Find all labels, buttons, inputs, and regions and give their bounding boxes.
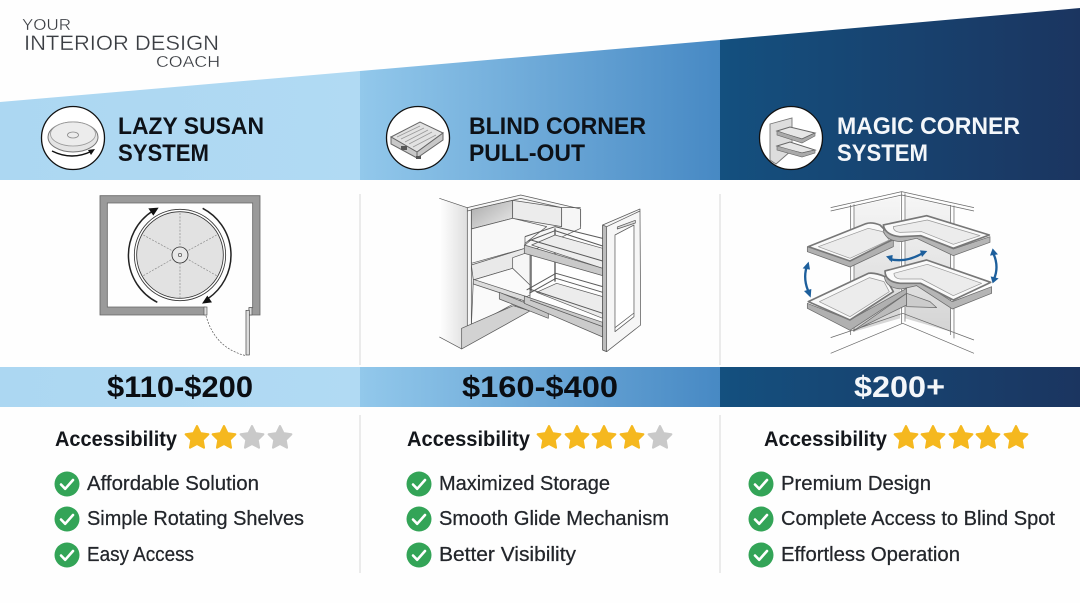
rating: blind corner: Accessibility <box>407 428 530 451</box>
price band: magic corner <box>720 367 1080 407</box>
logo: INTERIOR DESIGN <box>24 32 219 55</box>
feature list: lazy susan: Affordable Solution <box>87 473 259 495</box>
logo: YOUR <box>22 17 71 34</box>
feature list: lazy susan <box>54 472 304 568</box>
icon: lazy susan <box>42 106 104 170</box>
icon: magic corner shelves <box>760 106 822 170</box>
icon: pull-out tray <box>386 106 450 170</box>
feature list: magic corner: Complete Access to Blind Spot <box>781 508 1055 530</box>
diagram: magic corner shelves <box>803 192 999 353</box>
feature list: blind corner <box>406 472 669 568</box>
heading: SYSTEM <box>837 140 928 167</box>
heading <box>118 113 264 167</box>
price band: magic corner: $200+ <box>854 371 945 404</box>
heading: PULL-OUT <box>469 140 585 167</box>
diagram: lazy susan floor plan <box>100 196 260 356</box>
heading: MAGIC CORNER <box>837 113 1020 140</box>
feature list: blind corner: Maximized Storage <box>439 473 610 495</box>
feature list: magic corner: Premium Design <box>781 473 931 495</box>
rating: lazy susan <box>55 426 291 451</box>
rating: magic corner <box>764 426 1027 451</box>
feature list: blind corner: Smooth Glide Mechanism <box>439 508 669 530</box>
heading <box>469 113 646 167</box>
feature list: magic corner <box>748 472 1055 568</box>
price band: lazy susan <box>0 367 360 407</box>
heading: LAZY SUSAN <box>118 113 264 140</box>
rating: magic corner: Accessibility <box>764 428 887 451</box>
feature list: lazy susan: Simple Rotating Shelves <box>87 508 304 530</box>
logo <box>22 17 220 71</box>
price band: blind corner: $160-$400 <box>462 371 618 404</box>
logo: COACH <box>156 54 220 71</box>
panel: lazy susan header <box>0 71 360 180</box>
panel: blind corner header <box>360 40 720 180</box>
diagram: blind corner pull-out <box>439 195 641 352</box>
rating: lazy susan: Accessibility <box>55 428 177 451</box>
heading <box>837 113 1020 167</box>
panel: magic corner header <box>720 8 1080 180</box>
heading: BLIND CORNER <box>469 113 646 140</box>
rating: blind corner <box>407 426 671 451</box>
price band: lazy susan: $110-$200 <box>107 371 253 404</box>
feature list: lazy susan: Easy Access <box>87 544 194 566</box>
feature list: blind corner: Better Visibility <box>439 544 576 566</box>
price band: blind corner <box>360 367 720 407</box>
feature list: magic corner: Effortless Operation <box>781 544 960 566</box>
heading: SYSTEM <box>118 140 209 167</box>
